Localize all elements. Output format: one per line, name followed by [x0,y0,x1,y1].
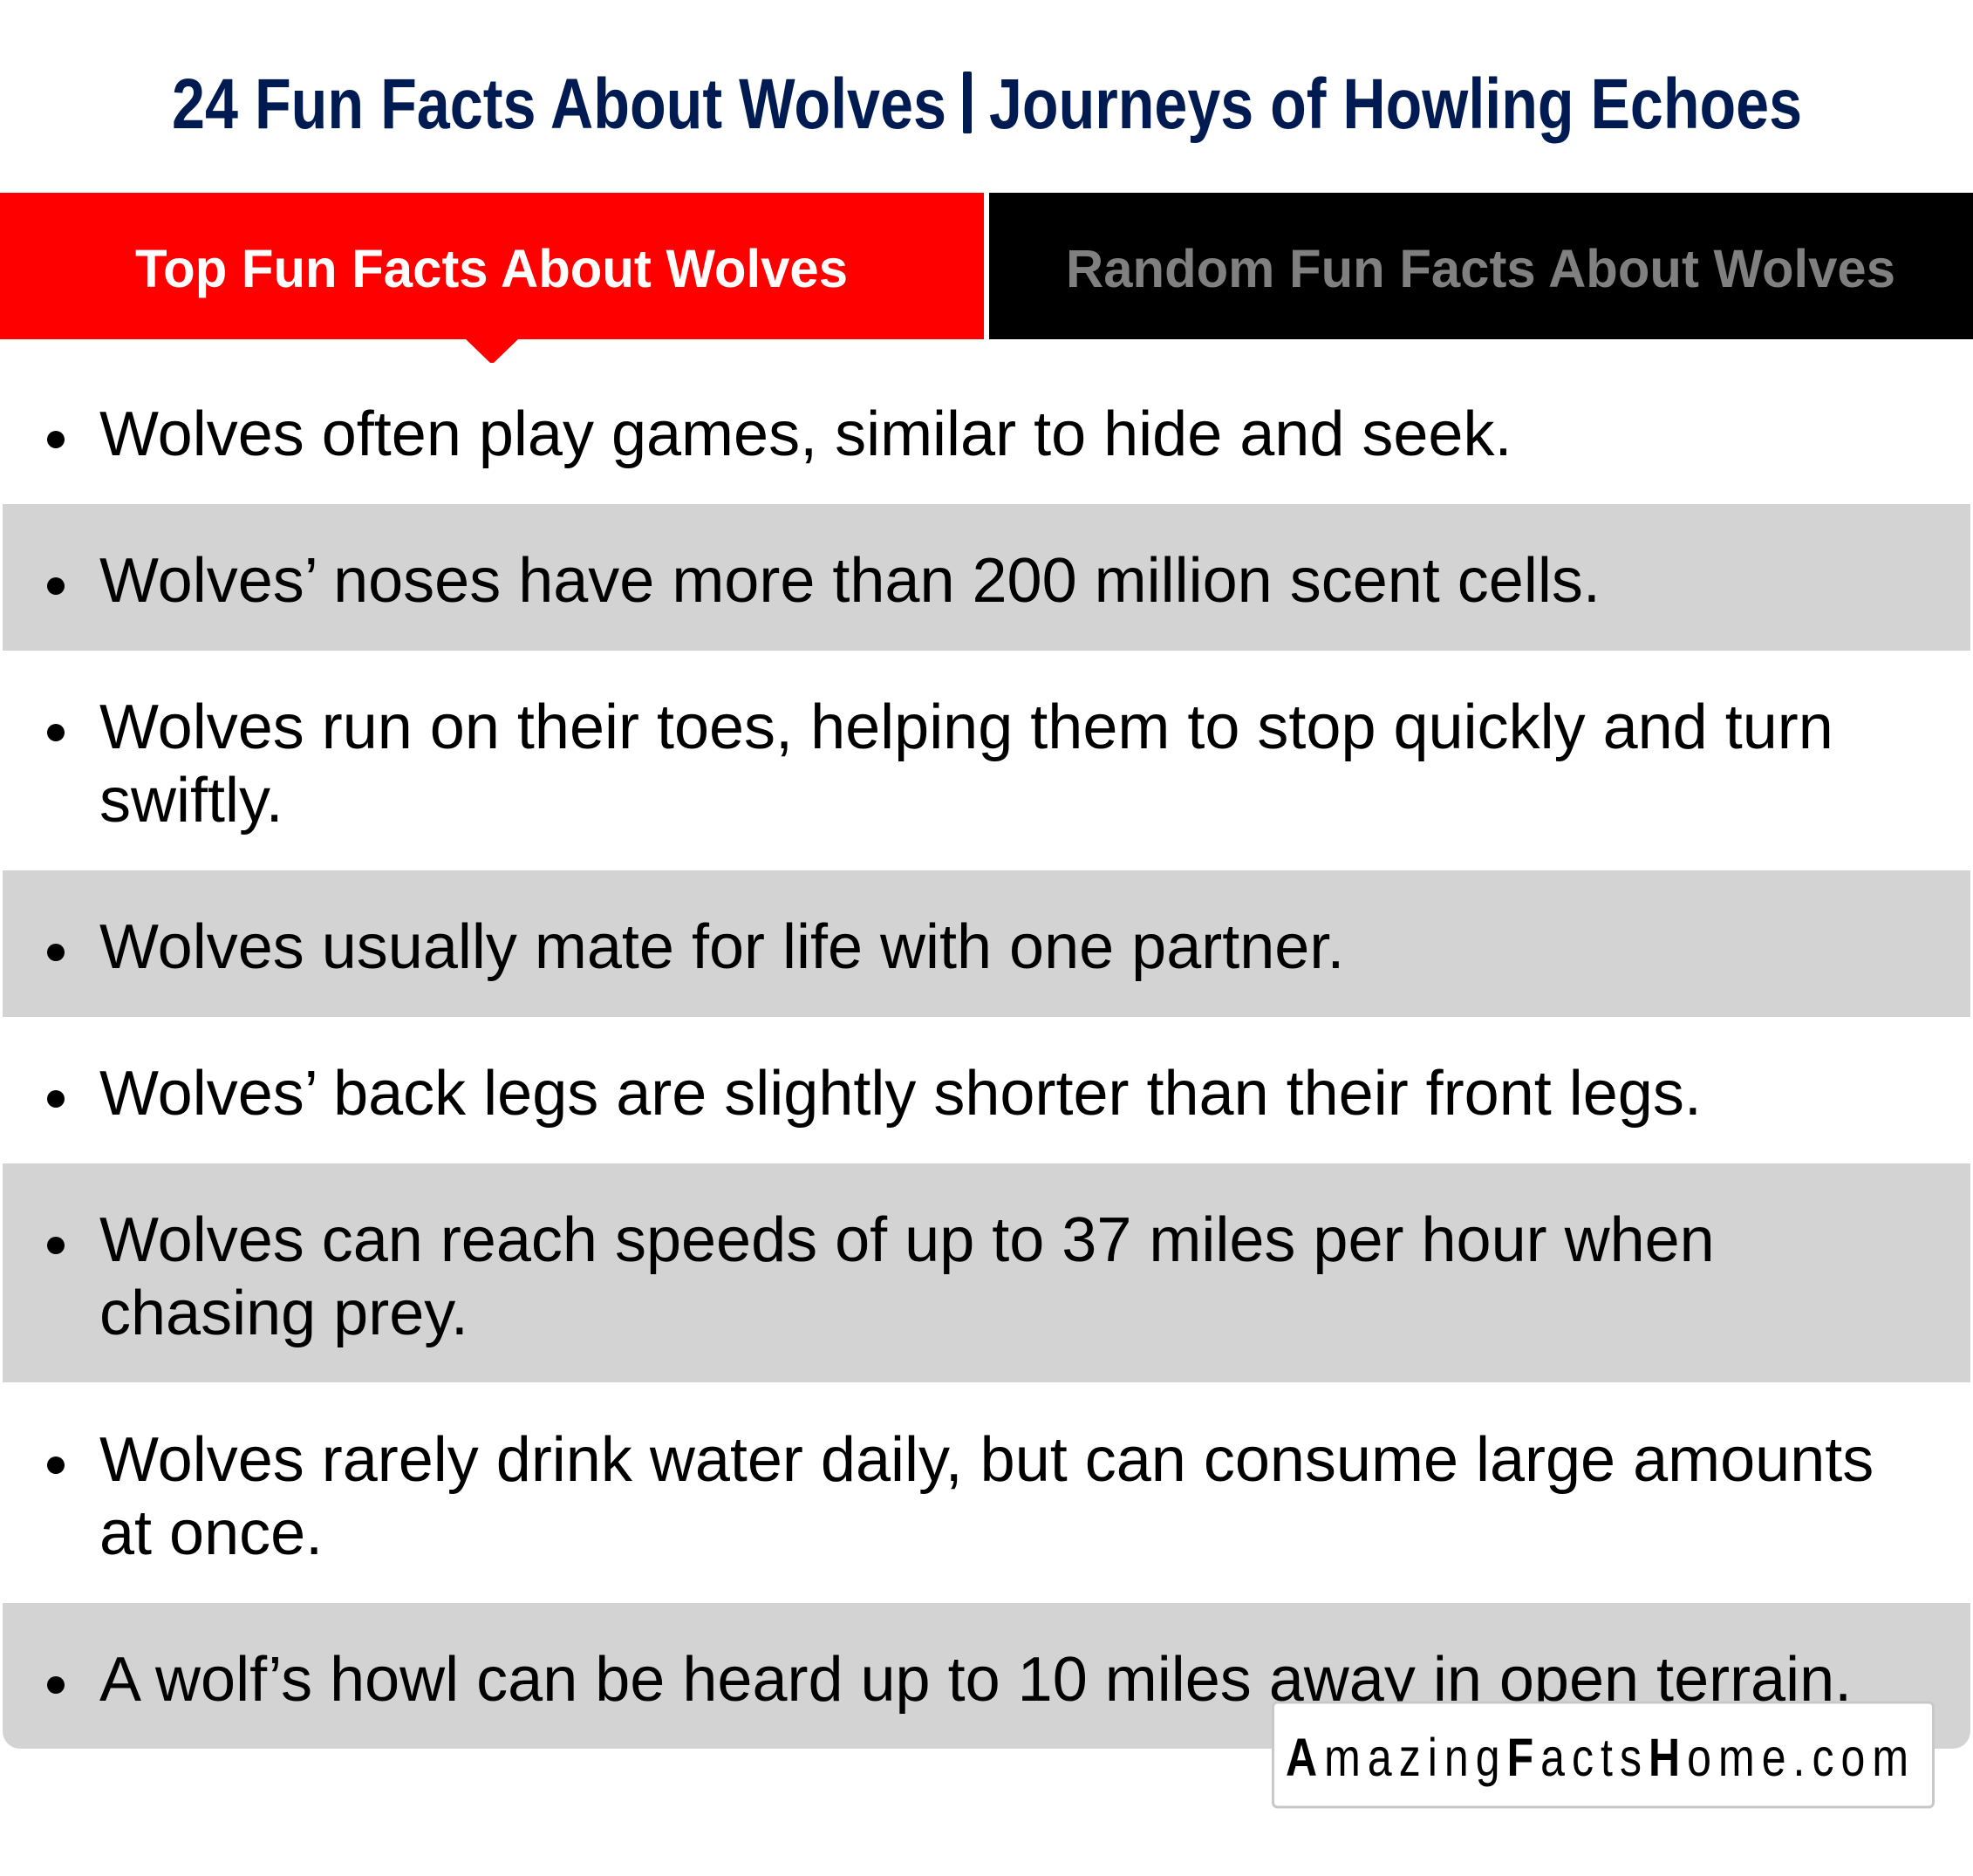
fact 3: swiftly. [99,766,283,836]
title: 24 Fun Facts About Wolves [172,65,946,144]
tab: top fun facts (active) [0,193,984,363]
fact 8 [3,1603,1970,1749]
fact 8: A wolf’s howl can be heard up to 10 miles away in open terrain. [99,1645,1852,1715]
fact 3 [47,692,1833,836]
title [172,65,1802,144]
fact 6: Wolves can reach speeds of up to 37 miles per hour when [99,1205,1715,1275]
tab: random fun facts (inactive): Random Fun Facts About Wolves [1066,239,1895,298]
fact 6: chasing prey. [99,1279,468,1348]
fact 4: Wolves usually mate for life with one partner. [99,912,1344,982]
watermark badge: AmazingFactsHome.com [1286,1728,1915,1787]
fact 1: Wolves often play games, similar to hide and seek. [99,399,1512,469]
fact 6 [3,1163,1970,1382]
fact 7 [47,1425,1874,1568]
tab: top fun facts (active): Top Fun Facts About Wolves [135,239,848,298]
tab: random fun facts (inactive) [989,193,1973,339]
fact 7: Wolves rarely drink water daily, but can consume large amounts [99,1425,1874,1495]
fact 5: Wolves’ back legs are slightly shorter than their front legs. [99,1059,1702,1129]
title: Journeys of Howling Echoes [989,65,1802,144]
fact 4 [3,870,1970,1017]
watermark badge [1273,1702,1933,1807]
fact 2: Wolves’ noses have more than 200 million scent cells. [99,546,1601,616]
fact 3: Wolves run on their toes, helping them to stop quickly and turn [99,692,1833,762]
fact 2 [3,504,1970,651]
fact 7: at once. [99,1498,323,1568]
